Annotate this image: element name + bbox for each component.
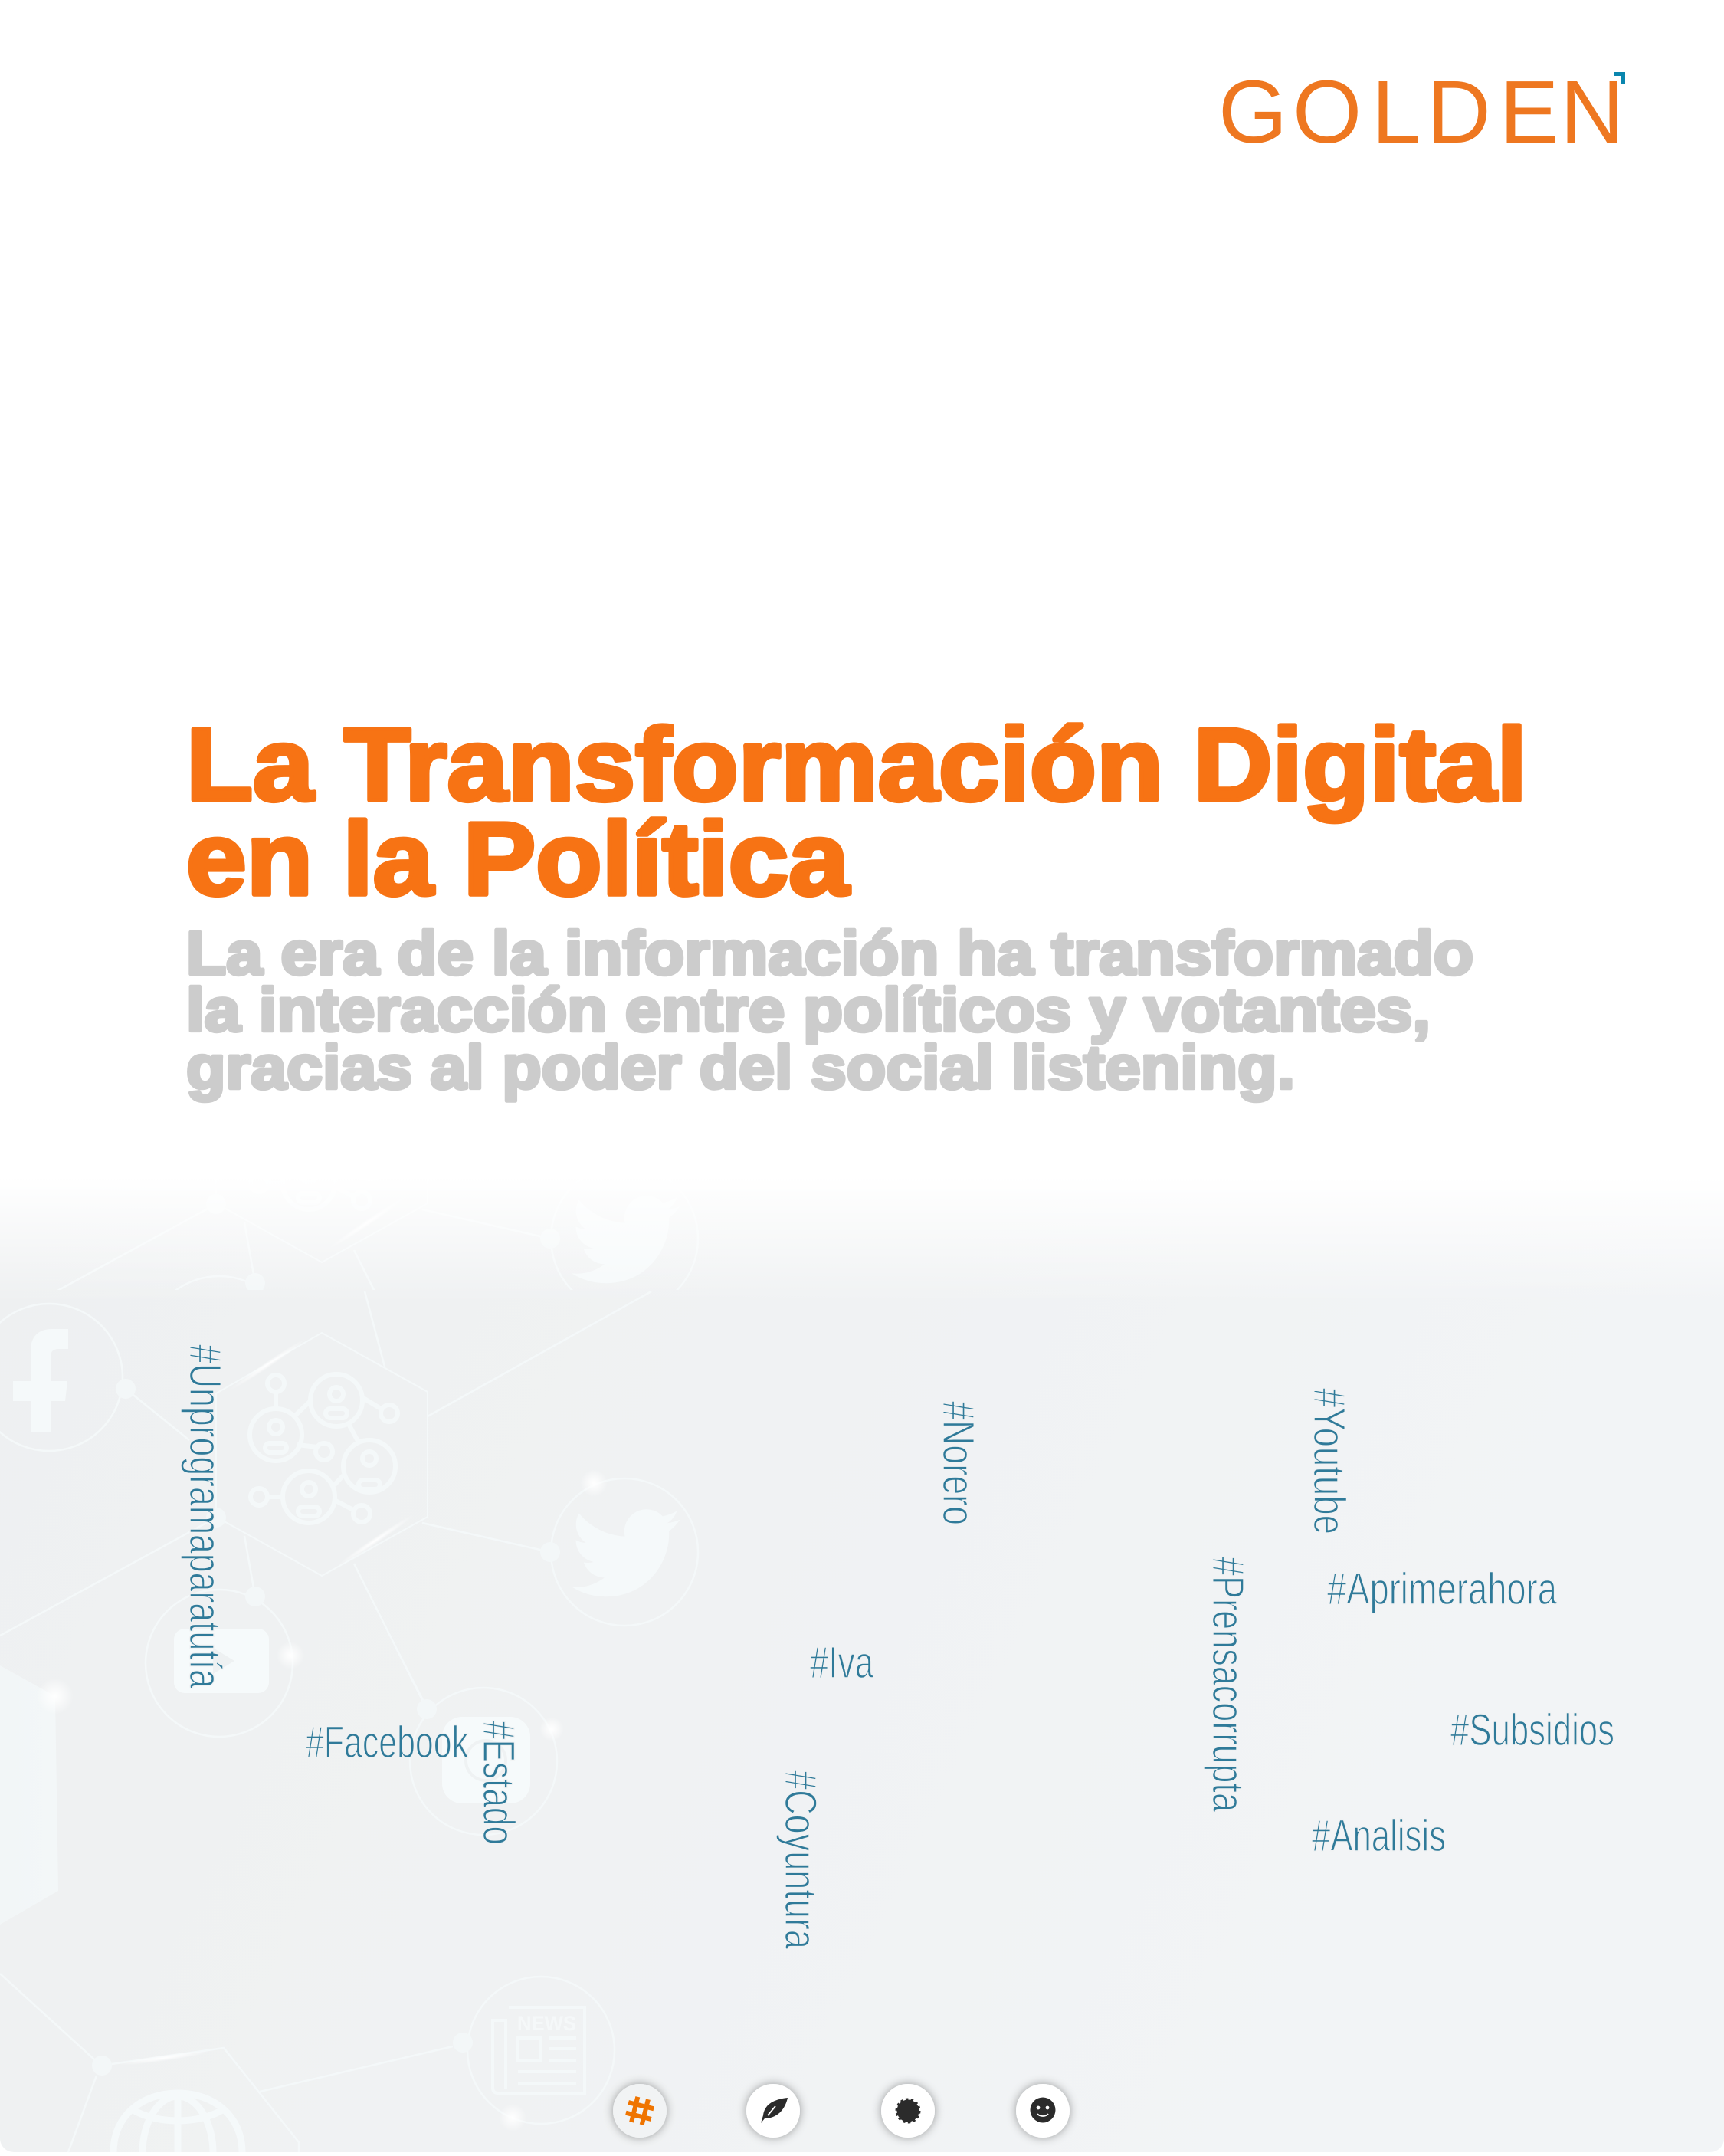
subtitle: gracias al poder del social listening.: [186, 1033, 1295, 1101]
subtitle: La era de la información ha transformado: [186, 919, 1473, 987]
left wall shape: [0, 1665, 58, 1925]
logo corner mark: [1614, 72, 1625, 84]
icon: instagram node: [396, 1648, 557, 1835]
title: La Transformación Digital: [186, 707, 1527, 822]
hashtag: Coyuntura: #Coyuntura: [775, 1770, 825, 1950]
title: en la Política: [186, 801, 850, 917]
hashtag: Youtube: #Youtube: [1304, 1388, 1354, 1534]
decorative glints: [37, 1194, 608, 2131]
network pattern: hexagon, people icon, facebook and twitter nodes: [0, 1291, 698, 1737]
hashtag: Analisis: #Analisis: [1312, 1811, 1446, 1861]
icon: smiley button: [1016, 2084, 1070, 2138]
icon: news node: [260, 1977, 615, 2124]
icon: news node: NEWS: [517, 2012, 576, 2035]
logo: GOLDEN: GOLDEN: [1218, 62, 1624, 162]
hashtag cloud: [180, 1344, 1614, 1950]
icon: hashtag button: [613, 2084, 667, 2138]
hashtag: Norero: #Norero: [933, 1401, 983, 1525]
hashtag: Facebook: #Facebook: [306, 1718, 469, 1767]
hashtag: Unprogramaparatutía: #Unprogramaparatutía: [180, 1344, 230, 1689]
icon: feather button: [746, 2084, 800, 2138]
hashtag: Subsidios: #Subsidios: [1450, 1705, 1614, 1755]
title: [186, 707, 1527, 917]
faded upper fragment of network pattern: [0, 978, 698, 1423]
icon: badge button: [881, 2084, 935, 2138]
white fade at top of background: [0, 1073, 1724, 1303]
icon: youtube tile: [174, 1629, 269, 1693]
subtitle: la interacción entre políticos y votantes,: [186, 976, 1431, 1044]
hashtag: Estado: #Estado: [474, 1721, 523, 1845]
panel: lower background with network pattern: [0, 1237, 1724, 2152]
icon: globe hexagon: [0, 1974, 299, 2152]
hashtag: Aprimerahora: #Aprimerahora: [1327, 1564, 1558, 1614]
hashtag: Iva: #Iva: [810, 1638, 874, 1688]
hashtag: Prensacorrupta: #Prensacorrupta: [1203, 1557, 1253, 1813]
subtitle: [186, 919, 1473, 1101]
bottom icon buttons: [613, 2084, 1070, 2138]
